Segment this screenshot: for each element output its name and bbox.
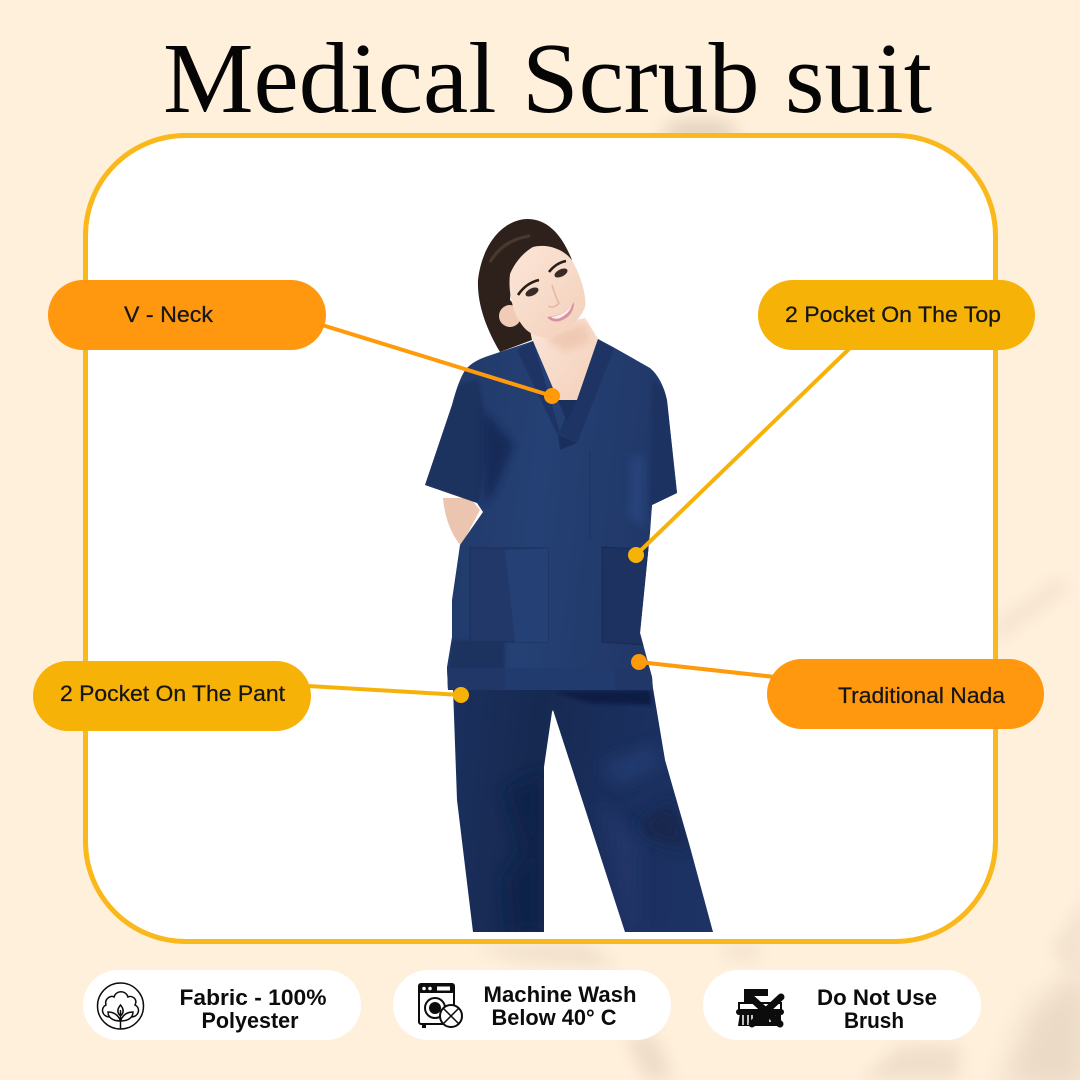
nose [548, 285, 559, 307]
callout: 2 Pocket On The Top: 2 Pocket On The Top [785, 302, 1001, 327]
care panel: machine wash: Below 40° C [492, 1005, 617, 1030]
care panel: machine wash [393, 970, 671, 1040]
arm [443, 498, 480, 546]
leader line: nada [631, 654, 775, 677]
callout: Traditional Nada: Traditional Nada [838, 683, 1006, 708]
leader line: top pocket [628, 348, 850, 563]
eyes [524, 286, 540, 298]
face [509, 246, 585, 338]
pants [453, 688, 713, 932]
care panel: no brush: Do Not Use [817, 985, 937, 1010]
icon: crossed brush [738, 989, 781, 1026]
shirt [420, 335, 685, 695]
title: Medical Scrub suit [163, 22, 932, 134]
care panel: fabric: Polyester [202, 1008, 299, 1033]
callout: Traditional Nada [767, 659, 1044, 729]
callout: 2 Pocket On The Top [758, 280, 1035, 350]
figure: woman in navy scrub suit [420, 219, 730, 940]
callout: V - Neck [48, 280, 326, 350]
icon: washing machine [419, 984, 462, 1028]
eyebrows [518, 280, 539, 295]
icon: cotton [98, 983, 144, 1029]
panel: product photo frame [86, 136, 996, 942]
care panel: machine wash: Machine Wash [484, 982, 636, 1007]
collar bands [517, 341, 560, 434]
hair [478, 219, 572, 352]
callout: 2 Pocket On The Pant: 2 Pocket On The Pant [60, 681, 285, 706]
callout: 2 Pocket On The Pant [33, 661, 311, 731]
callout: V - Neck: V - Neck [124, 302, 214, 327]
smile [547, 302, 574, 322]
leader line: V-neck [322, 325, 560, 404]
neck and chest skin [530, 318, 598, 402]
ear [499, 305, 521, 327]
care panel: fabric: Fabric - 100% [180, 985, 326, 1010]
care panel: no brush [703, 970, 981, 1040]
care panel: fabric [83, 970, 361, 1040]
care panel: no brush: Brush [844, 1008, 904, 1033]
pockets [470, 548, 548, 642]
hem [447, 640, 505, 690]
leader line: pant pocket [308, 686, 469, 703]
